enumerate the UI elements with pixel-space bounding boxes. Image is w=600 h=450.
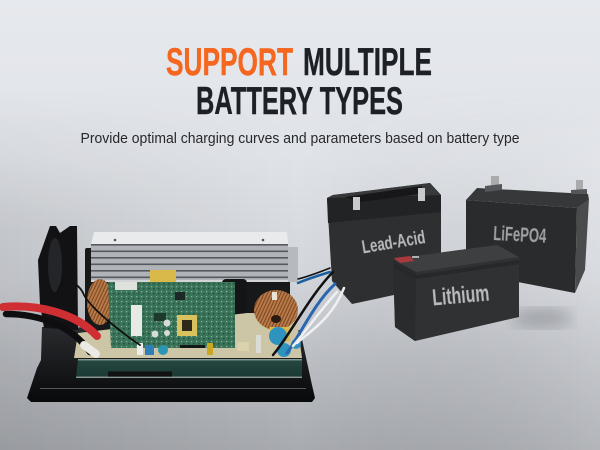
title: BATTERY TYPES [196,80,403,123]
yellow capacitor [150,270,176,283]
floor shadow [512,308,572,328]
terminal strap [345,186,425,210]
grey terminal [412,256,419,258]
case [393,245,519,341]
green control board [108,282,235,348]
heatsink [91,232,298,282]
terminals [485,176,587,194]
battery: LiFePO4 [466,176,589,293]
battery: Lithium [393,245,519,341]
red and black cables, left [3,282,140,354]
rear housing [85,248,290,333]
label: LiFePO4 [493,223,547,248]
title: SUPPORT [166,41,293,84]
label: Lithium [431,280,490,310]
fan [38,226,78,330]
left toroid coil [87,279,113,325]
main capacitors [222,279,247,338]
small blue and yellow components [137,327,301,357]
label: Lead-Acid [360,226,427,257]
right toroid coil [254,290,298,330]
red terminal [394,256,414,263]
beige base board [74,313,302,358]
battery: Lead-Acid [327,183,441,304]
case [466,200,577,293]
charger device [3,226,315,402]
cable bundle, right [273,268,344,355]
title: MULTIPLE [303,41,432,84]
title [166,41,432,123]
base plate [27,327,315,402]
case [327,183,441,304]
glass cover [76,359,302,378]
subtitle: Provide optimal charging curves and parameters based on battery type [80,131,520,147]
